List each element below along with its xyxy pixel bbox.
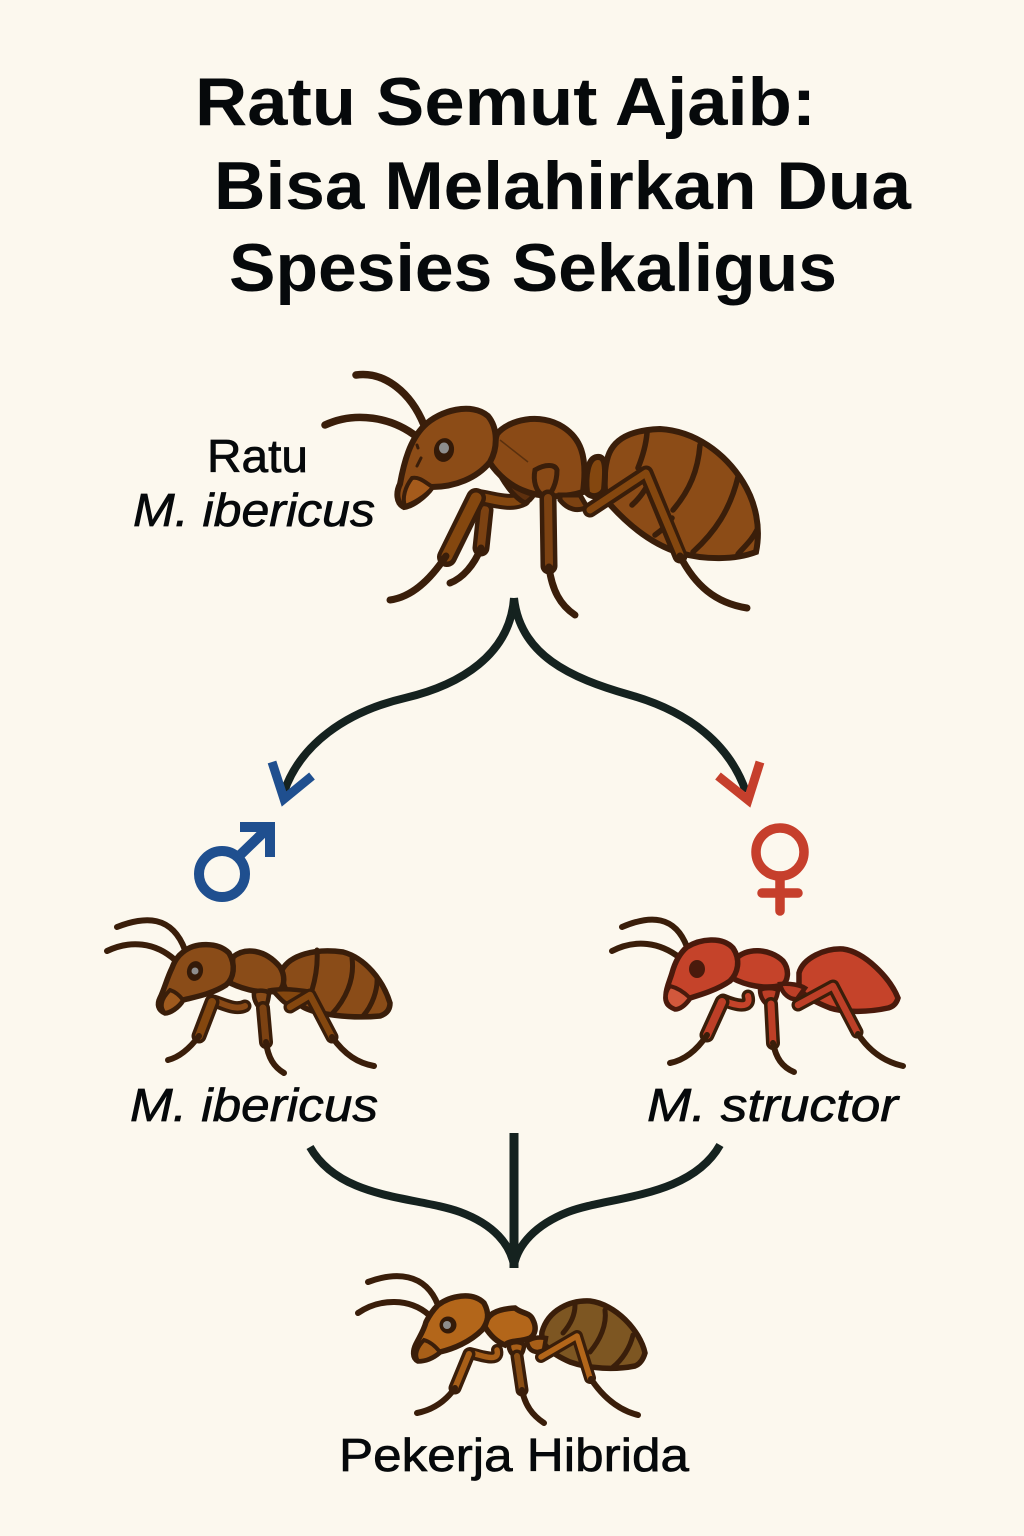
label: hybrid workers: Pekerja Hibrida [339, 1429, 689, 1481]
icon: M. structor ant [612, 920, 903, 1072]
icon: queen ant [325, 375, 758, 615]
title: Ratu Semut Ajaib: [195, 64, 816, 140]
arrow: queen to M. structor female [514, 598, 760, 800]
title [195, 64, 912, 306]
label: queen M. ibericus: M. ibericus [133, 484, 375, 536]
title: Spesies Sekaligus [229, 230, 837, 306]
icon: female symbol [756, 828, 804, 911]
arrowhead: blue [272, 762, 312, 799]
icon: hybrid worker ant [358, 1276, 645, 1423]
icon: male symbol [199, 827, 270, 897]
label: queen M. ibericus [133, 430, 375, 536]
label: M. ibericus: M. ibericus [130, 1079, 378, 1131]
arrowhead: red [718, 762, 760, 800]
arrow: merging into hybrid workers [310, 1133, 720, 1268]
arrow: queen to M. ibericus male [272, 598, 514, 799]
label: queen M. ibericus: Ratu [207, 430, 308, 482]
label: M. structor: M. structor [647, 1079, 900, 1131]
title: Bisa Melahirkan Dua [214, 148, 912, 224]
icon: M. ibericus ant [107, 920, 390, 1073]
